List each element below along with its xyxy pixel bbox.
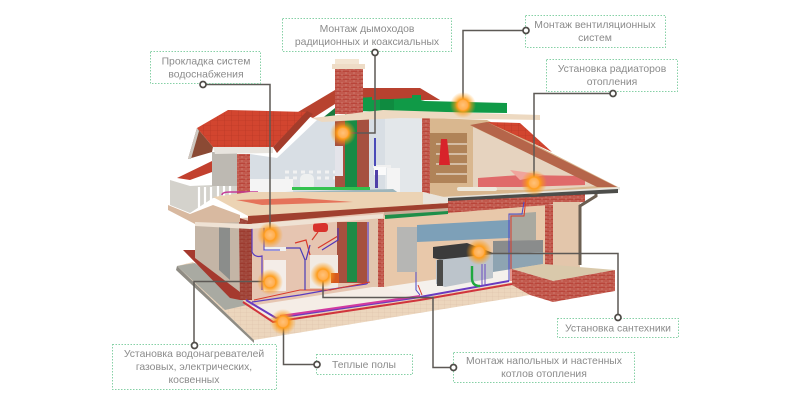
left wing under roof [212, 152, 250, 194]
callout: ventilation: Монтаж вентиляционных [534, 20, 656, 31]
hotspot: underfloor heating [270, 309, 296, 335]
leader line: ventilation [463, 30, 526, 106]
pipes: underfloor and risers [243, 198, 526, 322]
callout: water heaters: газовых, электрических, [136, 362, 252, 373]
back roof [298, 88, 440, 120]
callout: ventilation: систем [578, 33, 612, 44]
hotspot: ventilation [450, 92, 476, 118]
boiler room interior [239, 212, 420, 318]
brick porch [512, 264, 615, 302]
leader line: underfloor heating [284, 322, 317, 364]
hotspot: kitchen plumbing [466, 239, 492, 265]
callout: water supply: Прокладка систем [162, 56, 250, 68]
callout: boilers: котлов отопления [501, 369, 587, 380]
callout: radiators: отопления [587, 77, 637, 88]
callout: underfloor heating [314, 354, 412, 374]
upper floor right room with wardrobe [422, 118, 620, 198]
green ventilation ducts [343, 95, 507, 113]
ground floor exterior wall [195, 218, 240, 292]
callout: underfloor heating: Теплые полы [332, 360, 396, 371]
callout: water heaters [112, 342, 276, 390]
callout: water supply [150, 52, 260, 88]
callout: boilers: Монтаж напольных и настенных [466, 356, 623, 367]
leader line: chimneys [343, 52, 375, 133]
left main roof [188, 110, 313, 159]
leader line: plumbing [479, 254, 618, 317]
callout: chimneys [282, 18, 452, 56]
callout: water heaters: Установка водонагревателей [124, 349, 264, 360]
chimney [332, 59, 365, 114]
callout: radiators: Установка радиаторов [558, 64, 667, 75]
right roof slope [470, 122, 617, 187]
hotspot: radiator [521, 170, 547, 196]
leader line: water supply [203, 84, 270, 233]
balcony [168, 161, 240, 224]
roof slab [312, 110, 540, 122]
upper bathroom [222, 100, 423, 198]
eaves and gutter [423, 187, 620, 204]
hotspot: chimney flue [330, 120, 356, 146]
leader line: radiators [534, 94, 613, 184]
hotspot: boiler [310, 262, 336, 288]
foundation platform [176, 250, 530, 343]
callout: water heaters: косвенных [169, 375, 220, 386]
callout: plumbing: Установка сантехники [565, 324, 671, 334]
downpipe [580, 189, 596, 265]
callout: radiators [546, 60, 678, 96]
hotspot: water supply [257, 222, 283, 248]
first floor slab [195, 192, 448, 229]
ground floor window [219, 227, 230, 280]
roof beam with brick band [384, 190, 585, 268]
callout: chimneys: Монтаж дымоходов [320, 24, 415, 35]
illustration: house cutaway [168, 59, 620, 343]
callout: water supply: водоснабжения [168, 68, 244, 80]
hotspot: water heater [257, 269, 283, 295]
kitchen [384, 205, 546, 298]
leader line: boilers [323, 275, 453, 368]
leader line: water heaters [194, 282, 270, 345]
callout: chimneys: радиционных и коаксиальных [295, 37, 440, 48]
callout: ventilation [523, 16, 666, 48]
callout: plumbing [558, 314, 678, 338]
callout: boilers [450, 352, 634, 382]
